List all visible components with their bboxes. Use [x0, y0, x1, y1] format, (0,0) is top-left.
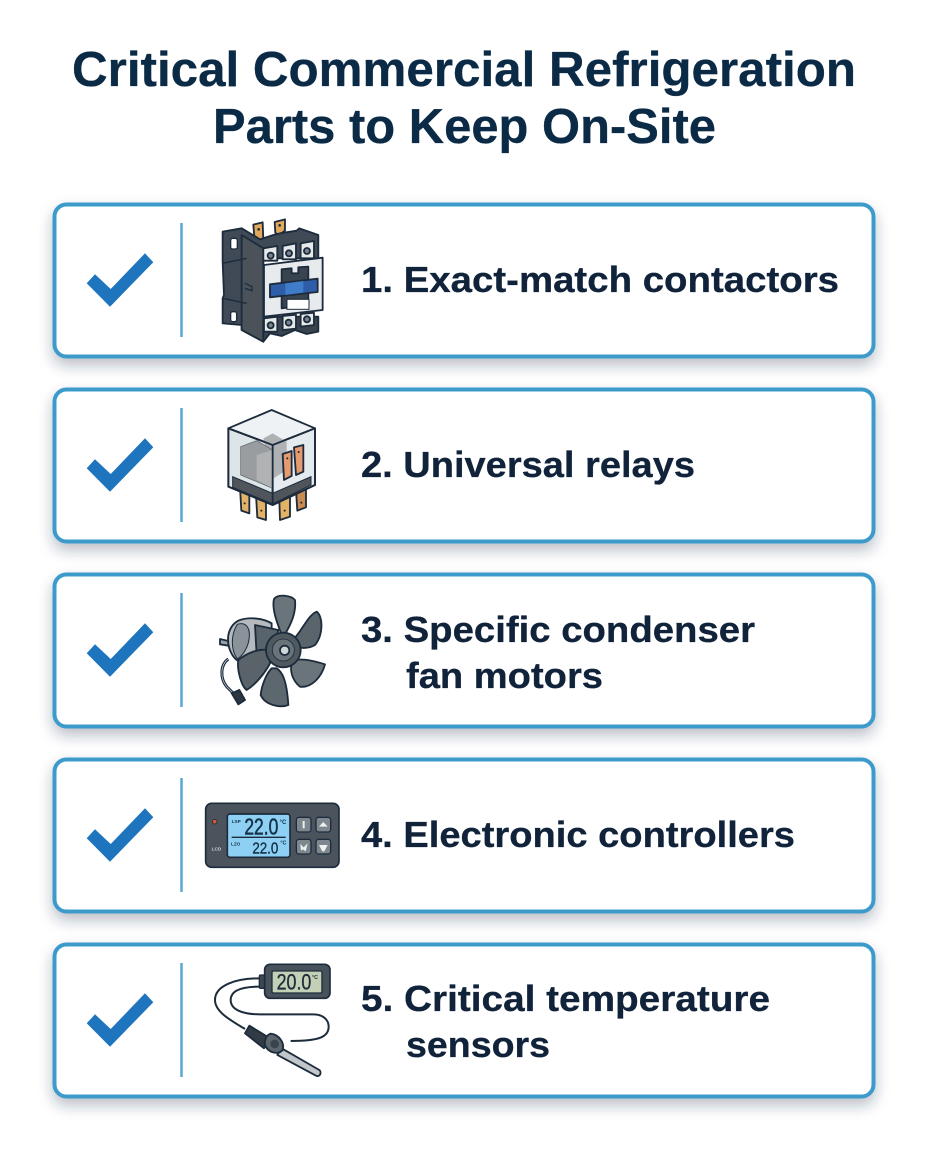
- icon: electronic controller: LCD: [212, 847, 222, 852]
- panel: critical temperature sensors: [54, 944, 874, 1096]
- icon: checkmark: [87, 438, 153, 492]
- panel: exact-match contactors: [54, 204, 874, 356]
- panel: specific condenser fan motors: [54, 574, 874, 726]
- icon: fan motor: [220, 596, 325, 706]
- icon: checkmark: [87, 993, 153, 1047]
- title: Parts to Keep On-Site: [213, 100, 716, 154]
- icon: checkmark: [87, 253, 153, 307]
- title: Critical Commercial Refrigeration: [72, 43, 856, 97]
- label: item 3: fan motors: [406, 655, 603, 696]
- panel: electronic controllers: [54, 760, 874, 912]
- icon: checkmark: [87, 808, 153, 862]
- panel: universal relays: [54, 390, 874, 542]
- icon: electronic controller: °C: [280, 820, 287, 826]
- label: item 5: [361, 978, 770, 1065]
- icon: temperature sensor: 20.0: [277, 970, 311, 995]
- label: item 3: [361, 609, 755, 696]
- icon: electronic controller: 22.0: [252, 840, 278, 857]
- icon: checkmark: [87, 623, 153, 677]
- icon: electronic controller: LSP: [232, 819, 241, 824]
- icon: electronic controller: °C: [280, 840, 286, 846]
- icon: electronic controller: LZO: [231, 842, 241, 847]
- icon: temperature sensor: °C: [312, 975, 318, 981]
- icon: electronic controller: [206, 803, 339, 867]
- label: item 5: 5. Critical temperature: [361, 978, 770, 1019]
- label: item 5: sensors: [406, 1024, 550, 1065]
- label: item 2: 2. Universal relays: [361, 444, 695, 485]
- icon: temperature sensor: [215, 964, 330, 1076]
- icon: relay: [228, 410, 315, 520]
- icon: electronic controller: 22.0: [244, 814, 278, 840]
- icon: contactor: [223, 219, 323, 342]
- label: item 3: 3. Specific condenser: [361, 609, 755, 650]
- label: item 1: 1. Exact-match contactors: [361, 259, 839, 300]
- title: [72, 43, 856, 154]
- label: item 4: 4. Electronic controllers: [361, 814, 795, 855]
